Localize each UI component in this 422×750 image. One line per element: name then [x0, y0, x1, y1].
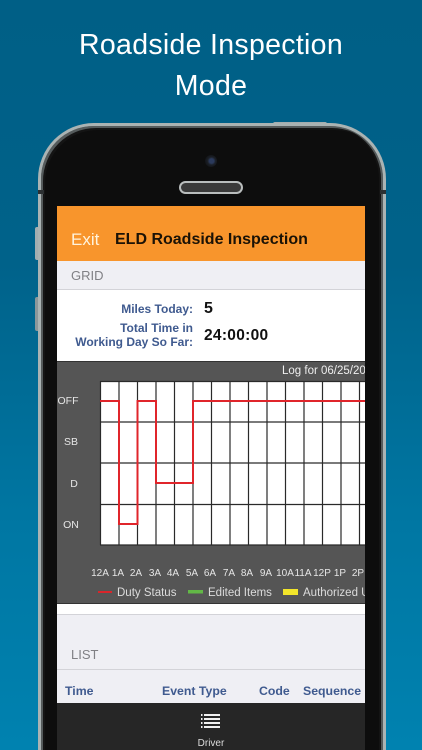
total time: Total Time in — [120, 321, 193, 335]
hour labels: 7A — [223, 568, 235, 579]
total time: 24:00:00 — [204, 327, 268, 344]
title — [79, 29, 343, 102]
legend: Edited Items — [208, 587, 272, 599]
hour labels: 12P — [313, 568, 331, 579]
phone body — [38, 123, 386, 750]
icon: volume down button — [35, 297, 39, 331]
left antenna notch — [38, 190, 44, 194]
tab label: Driver — [198, 738, 224, 749]
icon: power button — [273, 122, 327, 125]
icon: volume up button — [35, 227, 39, 260]
miles today: 5 — [204, 300, 213, 317]
hour labels: 1A — [112, 568, 124, 579]
log date: Log for 06/25/20 — [282, 365, 365, 377]
hour labels: 2A — [130, 568, 142, 579]
hour labels: 8A — [241, 568, 253, 579]
hour labels: 4A — [167, 568, 179, 579]
total time: Working Day So Far: — [75, 335, 193, 349]
table headers — [65, 684, 361, 698]
status labels — [58, 395, 79, 531]
hour labels: 10A — [276, 568, 294, 579]
list section — [57, 614, 365, 703]
hour labels: 3A — [149, 568, 161, 579]
hour labels: 6A — [204, 568, 216, 579]
list label: LIST — [71, 647, 98, 662]
miles today: Miles Today: — [121, 302, 193, 316]
screen — [57, 206, 365, 750]
header bar — [57, 206, 365, 261]
hour labels: 12A — [91, 568, 109, 579]
icon: camera — [205, 155, 217, 167]
table headers: Time — [65, 684, 93, 698]
hour labels: 9A — [260, 568, 272, 579]
grid section label — [57, 261, 365, 290]
hour labels: 5A — [186, 568, 198, 579]
status labels: SB — [64, 436, 78, 448]
table headers: Event Type — [162, 684, 227, 698]
total time — [75, 321, 268, 349]
title: Roadside Inspection — [79, 29, 343, 61]
exit button: Exit — [71, 230, 99, 249]
table headers: Code — [259, 684, 290, 698]
hour labels: 1P — [334, 568, 346, 579]
hour labels: 2P — [352, 568, 364, 579]
grid — [100, 381, 365, 545]
grid section label: GRID — [71, 268, 104, 283]
hour labels — [91, 568, 364, 579]
list label — [57, 615, 365, 670]
hour labels: 11A — [294, 568, 312, 579]
status labels: ON — [63, 519, 79, 531]
table headers: Sequence — [303, 684, 361, 698]
status labels: OFF — [58, 395, 78, 407]
duty status line — [100, 401, 365, 524]
title: Mode — [175, 70, 247, 102]
status labels: D — [70, 478, 78, 490]
icon: speaker — [179, 181, 243, 194]
legend — [98, 587, 369, 599]
right antenna notch — [380, 190, 386, 194]
miles today — [121, 300, 213, 317]
tab bar — [57, 703, 365, 750]
phone — [35, 122, 386, 750]
header title: ELD Roadside Inspection — [115, 231, 308, 248]
icon: list — [201, 714, 220, 728]
duty status chart — [57, 361, 365, 604]
legend: Duty Status — [117, 587, 177, 599]
